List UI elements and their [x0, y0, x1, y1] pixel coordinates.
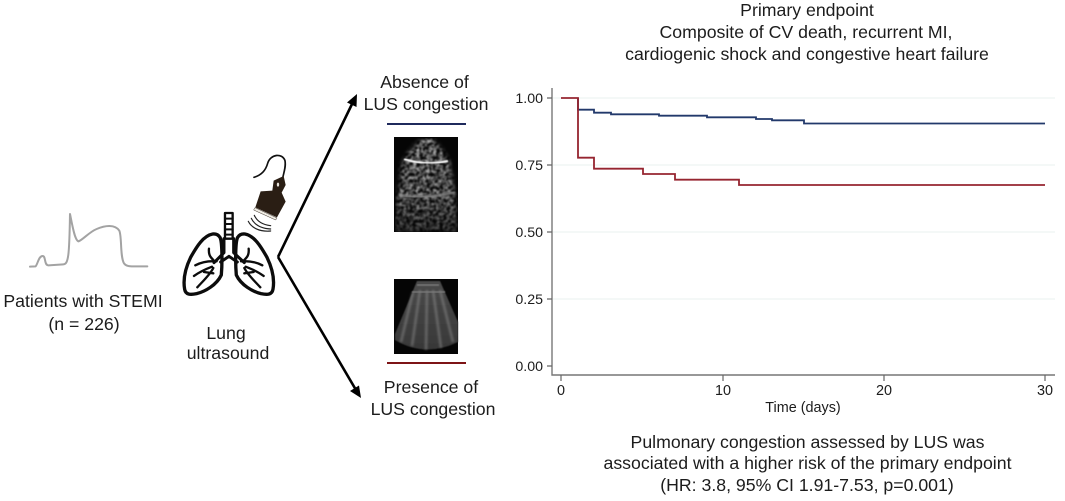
y axis: 0.25: [515, 292, 543, 308]
arrow: to absence of LUS congestion: [278, 94, 357, 257]
icon: ECG trace with ST elevation: [30, 214, 147, 267]
legend line: absence, blue: [387, 123, 466, 125]
title: primary endpoint: Primary endpoint: [740, 0, 874, 20]
y axis: [515, 88, 1055, 381]
curve: presence of congestion, red: [561, 98, 1045, 185]
x axis labels: [557, 383, 1053, 416]
ultrasound image: presence of congestion: [394, 279, 458, 354]
icon: ultrasound probe: [248, 155, 286, 231]
ultrasound image: absence of congestion: [394, 137, 458, 232]
text: lung ultrasound: [187, 323, 269, 363]
text: absence of LUS congestion: [364, 72, 488, 114]
text: patients with STEMI: (n = 226): [48, 314, 120, 334]
text: lung ultrasound: Lung: [206, 323, 246, 343]
y axis: 0.75: [515, 158, 543, 174]
title: primary endpoint: cardiogenic shock and congestive heart failure: [625, 44, 989, 64]
text: conclusion: (HR: 3.8, 95% CI 1.91-7.53, p=0.001): [660, 475, 954, 495]
text: presence of LUS congestion: Presence of: [384, 377, 478, 397]
x axis labels: 10: [715, 383, 731, 399]
text: presence of LUS congestion: [371, 377, 495, 419]
legend line: presence, red: [387, 362, 466, 364]
x axis labels: 0: [557, 383, 565, 399]
text: absence of LUS congestion: LUS congestion: [364, 94, 488, 114]
x axis labels: 20: [876, 383, 892, 399]
text: presence of LUS congestion: LUS congestion: [371, 399, 495, 419]
arrow: to presence of LUS congestion: [278, 257, 361, 398]
title: primary endpoint: [625, 0, 989, 64]
text: conclusion: [603, 432, 1012, 495]
text: conclusion: Pulmonary congestion assessed by LUS was: [631, 432, 985, 452]
y axis: 0.00: [515, 359, 543, 375]
text: patients with STEMI: Patients with STEMI: [3, 291, 163, 311]
text: conclusion: associated with a higher risk of the primary endpoint: [603, 453, 1012, 473]
x axis labels: Time (days): [765, 400, 841, 416]
text: absence of LUS congestion: Absence of: [380, 72, 469, 92]
x axis labels: 30: [1037, 383, 1053, 399]
icon: lungs: [184, 213, 274, 294]
text: lung ultrasound: ultrasound: [187, 343, 269, 363]
y axis: 1.00: [515, 91, 543, 107]
title: primary endpoint: Composite of CV death, recurrent MI,: [660, 22, 952, 42]
text: patients with STEMI: [3, 291, 163, 334]
curve: absence of congestion, blue: [578, 98, 1045, 124]
y axis: 0.50: [515, 225, 543, 241]
chart: Kaplan-Meier curves: [515, 88, 1055, 416]
